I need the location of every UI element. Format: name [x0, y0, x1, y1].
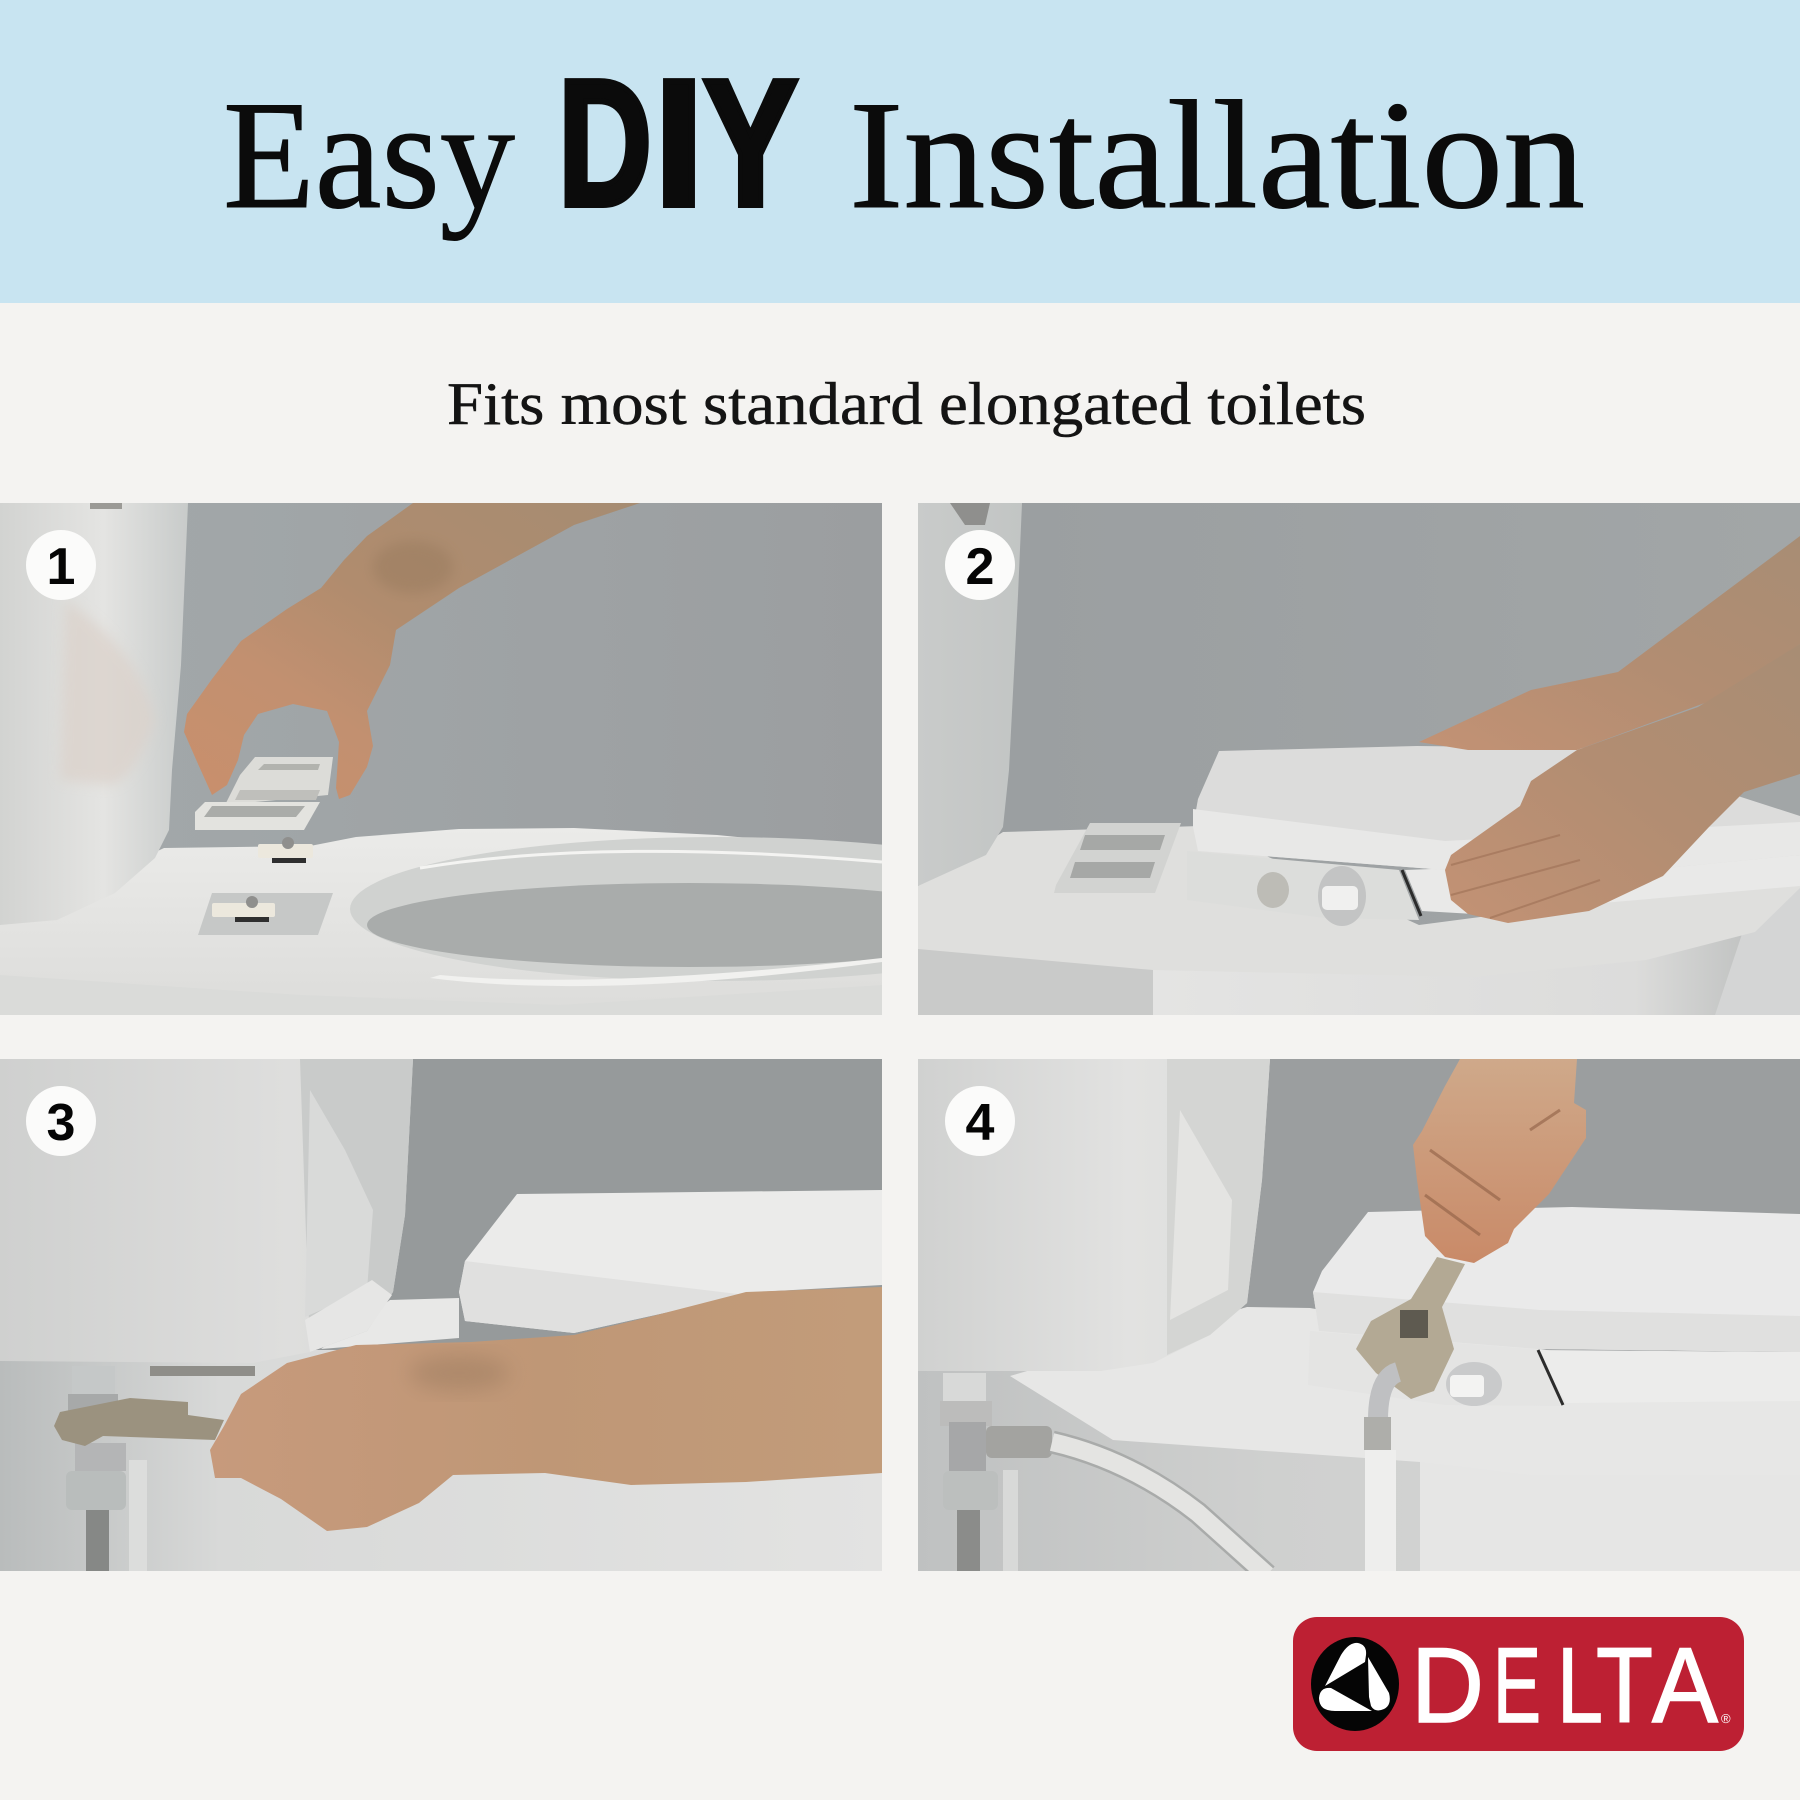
tank: [0, 1059, 413, 1363]
mounting screws: [212, 837, 313, 922]
number badge 4: [945, 1086, 1015, 1156]
tank fitting: [90, 503, 122, 509]
seat base right section: [1537, 1350, 1800, 1403]
toilet bowl: [1153, 895, 1755, 1015]
arm shading: [409, 1355, 509, 1391]
upper hand and arm: [1419, 536, 1800, 750]
tank side bulge: [305, 1090, 373, 1317]
seat lid: [1313, 1207, 1800, 1352]
seat lid: [459, 1190, 882, 1333]
finger creases: [1451, 835, 1600, 918]
bracket in hand: [195, 757, 333, 830]
number badge 2: [945, 530, 1015, 600]
panel: step 2 photo: [918, 503, 1800, 1015]
finger creases: [1425, 1110, 1560, 1235]
number badge 2: 2: [966, 538, 994, 596]
number badge 4: 4: [966, 1094, 995, 1152]
lower hand and arm: [1445, 644, 1800, 923]
title: Easy: [223, 69, 515, 241]
seat base unit: [1308, 1331, 1560, 1406]
toilet base left: [918, 940, 1153, 1015]
white hose to seat: [1365, 1450, 1396, 1571]
arm shading: [373, 541, 453, 593]
mounting bracket: [1054, 823, 1181, 893]
toilet deck: [1010, 1307, 1800, 1475]
panel: step 3 photo: [0, 1059, 882, 1571]
tank underside shadow: [150, 1366, 255, 1376]
tank side bulge: [1170, 1110, 1232, 1320]
side port: [1257, 872, 1289, 908]
logo wordmark: A: [1652, 1625, 1719, 1745]
tank: [918, 1059, 1270, 1371]
tank flange: [305, 1280, 392, 1352]
title: Installation: [849, 69, 1585, 241]
wall: [0, 503, 882, 1015]
number badge 1: 1: [47, 538, 75, 596]
mounting plate: [198, 893, 333, 935]
hand and arm: [184, 503, 640, 799]
bowl water: [367, 883, 1011, 967]
white supply tube: [129, 1460, 147, 1571]
logo red badge: [1293, 1617, 1744, 1751]
seam line: [1402, 870, 1421, 916]
hand: [1413, 1059, 1586, 1263]
chrome pipe and fitting: [1364, 1372, 1398, 1450]
logo wordmark: L: [1557, 1625, 1603, 1745]
white supply hose: [1052, 1442, 1267, 1575]
adjustment knob: [1446, 1362, 1502, 1406]
logo emblem: [1311, 1637, 1399, 1731]
registered mark: ®: [1721, 1711, 1731, 1726]
logo: Delta: [1293, 1617, 1744, 1751]
toilet lower body: [918, 1360, 1800, 1571]
toilet deck: [918, 826, 1800, 977]
wall: [0, 1059, 882, 1571]
background floor area: [1700, 880, 1800, 1015]
tank reflection: [60, 600, 155, 785]
lid front band: [459, 1261, 746, 1333]
rim highlight: [420, 851, 882, 868]
logo wordmark: T: [1596, 1625, 1653, 1745]
logo wordmark: [1411, 1625, 1719, 1745]
header band: [0, 0, 1800, 303]
tank: [0, 503, 188, 925]
logo wordmark: E: [1493, 1625, 1541, 1745]
seam line: [1538, 1350, 1563, 1405]
lid front band: [1193, 809, 1800, 870]
toilet lower body: [0, 975, 882, 1015]
tank right strip: [1167, 1059, 1270, 1355]
wrench: [1356, 1257, 1465, 1399]
seat base unit: [1187, 851, 1419, 920]
panel: step 4 photo: [918, 1059, 1800, 1571]
valve and supply hose: [66, 1366, 126, 1571]
number badge 1: [26, 530, 96, 600]
valve and supply hose: [940, 1373, 1052, 1571]
title: [223, 50, 1585, 244]
toilet deck and rim: [0, 828, 882, 1015]
number badge 3: 3: [47, 1094, 75, 1152]
panel: step 1 photo: [0, 503, 882, 1015]
wrench: [54, 1398, 224, 1446]
seat lid: [1193, 746, 1800, 870]
white inlet tube: [1003, 1470, 1018, 1571]
toilet deck: [321, 1298, 459, 1349]
number badge 3: [26, 1086, 96, 1156]
wall: [918, 1059, 1800, 1571]
toilet bowl: [1420, 1460, 1800, 1571]
tank right strip: [300, 1059, 413, 1352]
tank fitting: [950, 503, 990, 525]
tank: [918, 503, 1022, 886]
subtitle: Fits most standard elongated toilets: [447, 371, 1366, 437]
arm and fist: [210, 1287, 882, 1531]
toilet lower body: [0, 1350, 882, 1571]
lid front band: [1313, 1292, 1800, 1352]
bowl front rim: [430, 958, 882, 986]
adjustment knob: [1318, 866, 1366, 926]
wall: [918, 503, 1800, 1015]
bowl opening: [350, 837, 1084, 981]
logo wordmark: D: [1411, 1625, 1484, 1745]
seat base right section: [1405, 855, 1800, 914]
